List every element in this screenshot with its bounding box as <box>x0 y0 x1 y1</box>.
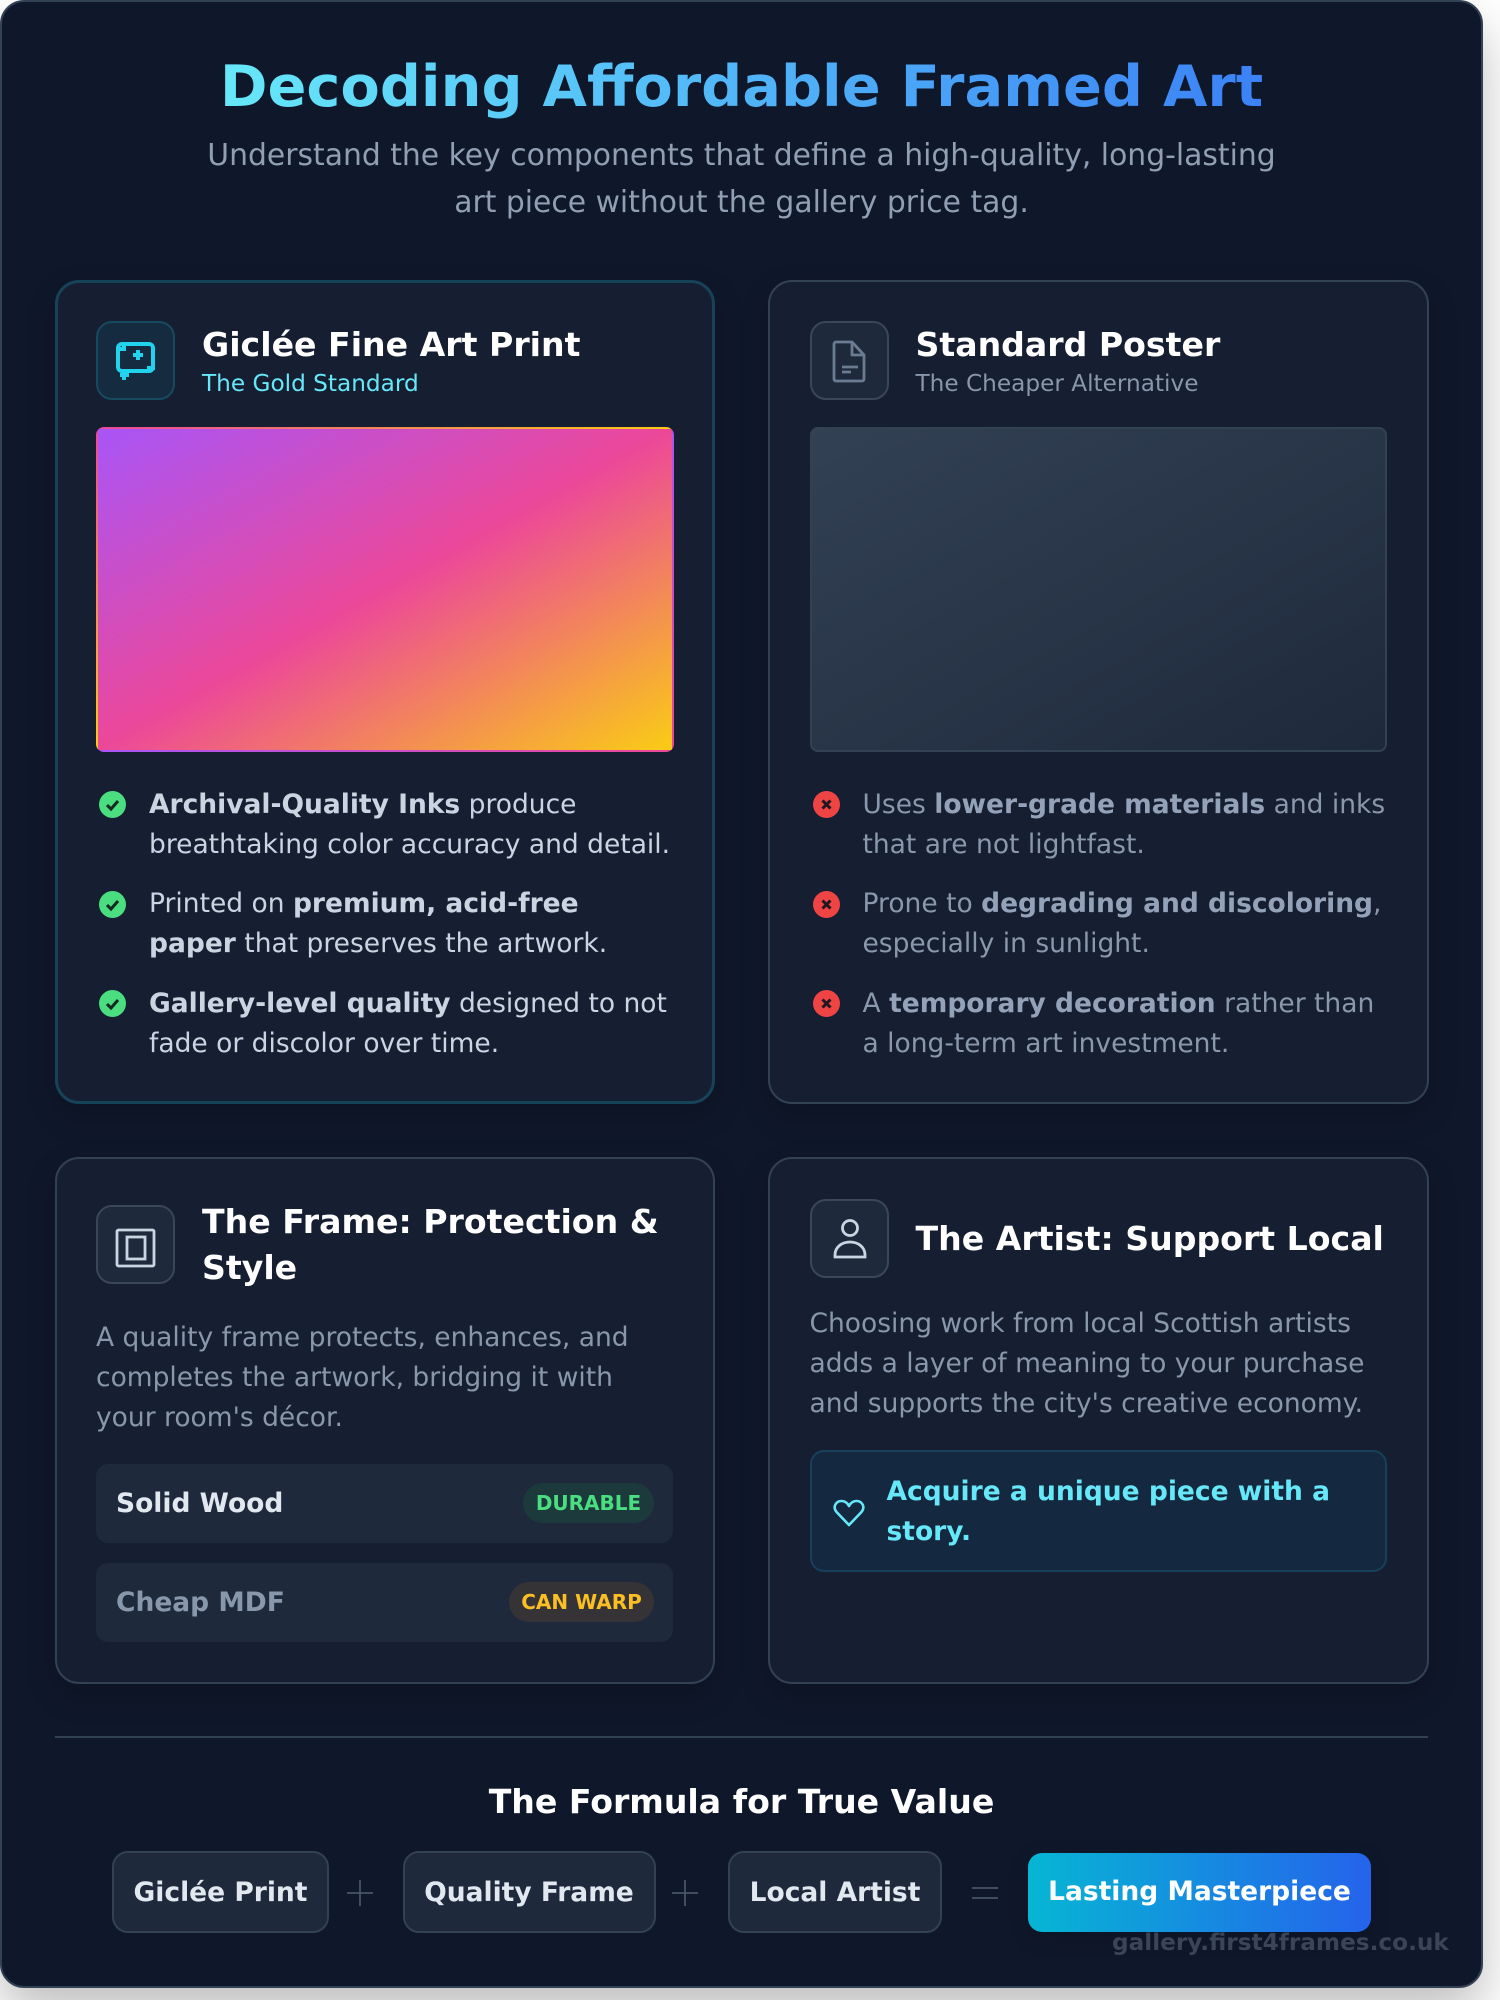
benefit text 2: paper that preserves the artwork. <box>149 928 607 959</box>
callout: story <box>810 1450 1387 1572</box>
benefit text 3: fade or discolor over time. <box>149 1028 499 1059</box>
drawback text 3: a long-term art investment. <box>862 1028 1229 1059</box>
badge: can warp <box>509 1582 654 1622</box>
benefit text 3 <box>149 988 667 1059</box>
formula term: quality frame: Quality Frame <box>424 1877 634 1908</box>
icon: frame <box>96 1205 175 1284</box>
drawback text 3 <box>862 988 1374 1059</box>
icon: cross <box>813 891 840 918</box>
icon: heart <box>833 1500 865 1526</box>
callout text <box>886 1476 1330 1547</box>
benefit list <box>99 789 670 1059</box>
heading: giclee: Giclée Fine Art Print <box>202 325 580 364</box>
icon: cross <box>813 791 840 818</box>
operator: plus <box>347 1880 373 1906</box>
subtitle <box>207 138 1276 220</box>
badge: durable: DURABLE <box>536 1491 641 1515</box>
formula term: giclee print <box>112 1851 329 1933</box>
comparison row: cheap mdf <box>96 1563 673 1642</box>
frame description: A quality frame protects, enhances, and <box>96 1322 629 1353</box>
subtitle: art piece without the gallery price tag. <box>454 185 1029 220</box>
callout text: Acquire a unique piece with a <box>886 1476 1330 1507</box>
formula heading: The Formula for True Value <box>489 1782 994 1821</box>
drawback text 1: Uses lower-grade materials and inks <box>862 789 1385 820</box>
formula term: giclee print: Giclée Print <box>134 1877 307 1908</box>
heading: poster: Standard Poster <box>916 325 1220 364</box>
panel: the artist <box>768 1157 1429 1684</box>
subheading: cheaper alternative: The Cheaper Alternative <box>916 370 1198 397</box>
label: cheap mdf: Cheap MDF <box>116 1587 285 1618</box>
drawback list <box>813 789 1385 1059</box>
formula result: lasting masterpiece <box>1028 1853 1371 1932</box>
panel: standard poster <box>768 280 1429 1104</box>
frame description: your room's décor. <box>96 1402 343 1433</box>
benefit text 1 <box>149 789 670 860</box>
frame description: completes the artwork, bridging it with <box>96 1362 613 1393</box>
badge: durable <box>523 1483 654 1523</box>
frame description <box>96 1322 629 1433</box>
subtitle: Understand the key components that define a high-quality, long-lasting <box>207 138 1276 173</box>
drawback text 3: A temporary decoration rather than <box>862 988 1374 1019</box>
benefit text 2 <box>149 888 607 959</box>
drawback text 1: that are not lightfast. <box>862 829 1145 860</box>
operator: plus <box>672 1880 698 1906</box>
divider <box>55 1736 1428 1738</box>
drawback text 2: Prone to degrading and discoloring, <box>862 888 1381 919</box>
artist description: adds a layer of meaning to your purchase <box>810 1348 1364 1379</box>
artist description: and supports the city's creative economy. <box>810 1388 1363 1419</box>
callout text: story. <box>886 1516 971 1547</box>
title: Decoding Affordable Framed Art <box>220 53 1263 120</box>
label: solid wood: Solid Wood <box>116 1488 283 1519</box>
subheading: gold standard: The Gold Standard <box>202 370 419 397</box>
artist description: Choosing work from local Scottish artists <box>810 1308 1351 1339</box>
benefit text 2: Printed on premium, acid-free <box>149 888 579 919</box>
formula term: local artist: Local Artist <box>750 1877 920 1908</box>
panel: the frame <box>55 1157 715 1684</box>
drawback text 2: especially in sunlight. <box>862 928 1150 959</box>
operator: equals <box>972 1887 998 1899</box>
formula result: lasting masterpiece: Lasting Masterpiece <box>1048 1876 1351 1907</box>
formula term: local artist <box>728 1851 942 1933</box>
icon: check <box>99 891 126 918</box>
benefit text 1: Archival-Quality Inks produce <box>149 789 576 820</box>
icon: person <box>810 1199 889 1278</box>
comparison row: solid wood <box>96 1464 673 1543</box>
artwork swatch: vivid gradient <box>96 427 674 752</box>
artist description <box>810 1308 1364 1419</box>
drawback text 2 <box>862 888 1381 959</box>
benefit text 1: breathtaking color accuracy and detail. <box>149 829 670 860</box>
formula term: quality frame <box>402 1851 656 1933</box>
heading: frame <box>202 1202 659 1287</box>
icon: document <box>810 321 889 400</box>
icon: cross <box>813 990 840 1017</box>
heading: artist: The Artist: Support Local <box>916 1219 1384 1258</box>
benefit text 3: Gallery-level quality designed to not <box>149 988 667 1019</box>
badge: can warp: CAN WARP <box>521 1590 642 1614</box>
artwork swatch: muted gradient <box>810 427 1387 752</box>
watermark: gallery.first4frames.co.uk <box>1112 1929 1449 1956</box>
heading: frame: The Frame: Protection & <box>202 1202 659 1241</box>
heading: frame: Style <box>202 1248 297 1287</box>
icon: check <box>99 990 126 1017</box>
panel: giclee print <box>55 280 715 1104</box>
icon: check <box>99 791 126 818</box>
drawback text 1 <box>862 789 1385 860</box>
icon: giclee image <box>96 321 175 400</box>
